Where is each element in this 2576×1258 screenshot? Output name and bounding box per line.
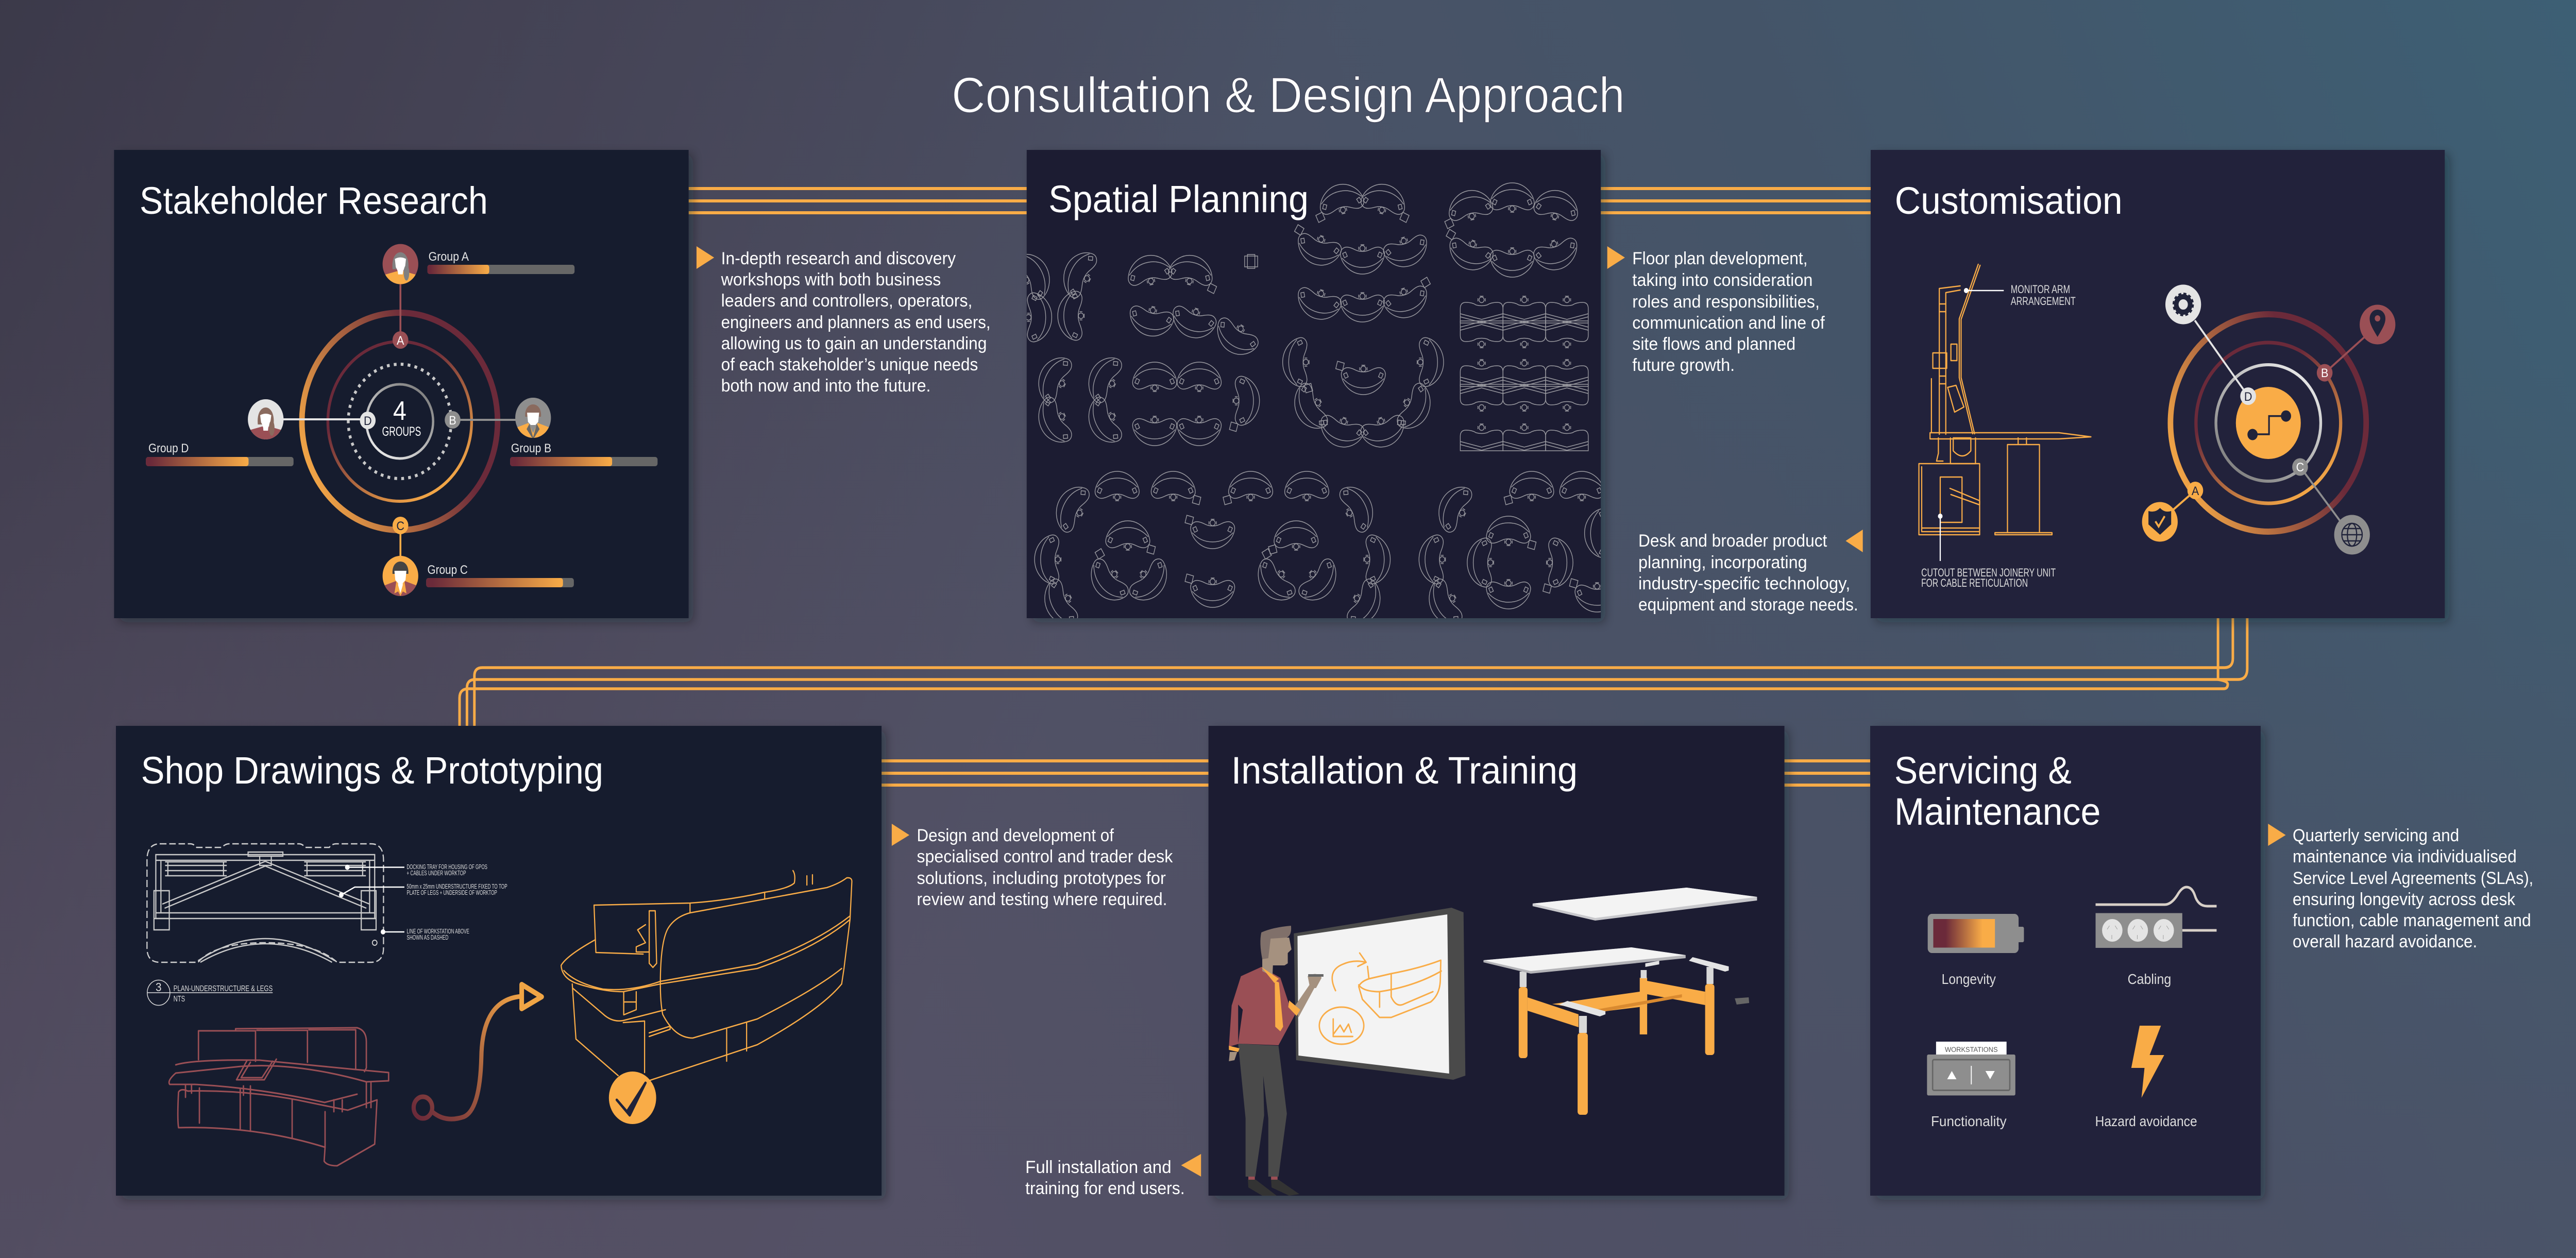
icon: avatar group D [247, 399, 284, 440]
bar: group D [146, 441, 294, 466]
chart: concentric group rings: 4 [393, 396, 406, 426]
icon: approval check [609, 1072, 656, 1124]
chart: customisation rings: A [2192, 484, 2199, 498]
icon: lightning bolt, hazard avoidance: Hazard avoidance [2095, 1113, 2197, 1129]
callout: stakeholder research: engineers and planners as end users, [721, 313, 991, 332]
callout: installation and training [1025, 1154, 1201, 1198]
icon: avatar group A [382, 244, 419, 285]
heading: customisation: Customisation [1895, 179, 2123, 222]
callout: shop drawings [892, 824, 1173, 909]
callout: customisation: industry-specific technology, [1638, 574, 1850, 593]
icon: globe [2334, 515, 2370, 554]
drawing reference tag: PLAN-UNDERSTRUCTURE & LEGS [174, 984, 273, 993]
icon: location pin [2360, 305, 2395, 344]
callout: spatial planning: taking into consideration [1632, 270, 1812, 290]
drawing reference tag [147, 980, 273, 1006]
annotation: cutout [1921, 514, 2056, 589]
callout: servicing: Quarterly servicing and [2293, 826, 2459, 845]
chart: concentric group rings: GROUPS [382, 424, 421, 439]
heading: servicing: Servicing & [1894, 749, 2072, 792]
annotation: docking tray: DOCKING TRAY FOR HOUSING OF GPOS [406, 863, 487, 871]
panel: stakeholder research [114, 150, 689, 618]
connectors: bottom row [882, 759, 1870, 787]
callout: shop drawings: Design and development of [917, 826, 1114, 845]
callout: customisation [1638, 530, 1863, 614]
callout: spatial planning: site flows and planned [1632, 334, 1795, 353]
icon: desk controller, functionality: WORKSTATIONS [1945, 1045, 1998, 1053]
callout: shop drawings: specialised control and trader desk [917, 847, 1173, 866]
callout: stakeholder research: both now and into the future. [721, 376, 930, 395]
annotation: monitor arm: MONITOR ARM [2011, 283, 2070, 296]
annotation: workstation line [381, 927, 469, 941]
annotation: docking tray [345, 863, 487, 877]
icon: battery, longevity: Longevity [1942, 971, 1996, 987]
annotation: workstation line: SHOWN AS DASHED [406, 933, 448, 941]
callout: servicing: maintenance via individualised [2293, 847, 2517, 866]
annotation: understructure [339, 882, 507, 897]
callout: stakeholder research: of each stakeholder’s unique needs [721, 355, 978, 374]
icon: avatar group B [515, 397, 552, 438]
annotation: monitor arm [1964, 283, 2076, 308]
bar: group C: Group C [428, 563, 468, 576]
main title: Consultation & Design Approach [952, 67, 1625, 123]
panel: servicing and maintenance [1870, 726, 2261, 1196]
bar: group B [510, 441, 657, 466]
chart: customisation rings [2171, 314, 2366, 532]
heading: spatial planning: Spatial Planning [1048, 178, 1309, 220]
heading: maintenance: Maintenance [1894, 790, 2100, 833]
callout: customisation: Desk and broader product [1638, 531, 1827, 550]
callout: spatial planning [1607, 246, 1825, 375]
heading: stakeholder research: Stakeholder Research [140, 179, 488, 222]
section drawing of desk [1919, 264, 2091, 535]
annotation: understructure: 50mm x 25mm UNDERSTRUCTURE FIXED TO TOP [406, 882, 507, 890]
callout: shop drawings: solutions, including prototypes for [917, 869, 1166, 888]
figure: presenter [1229, 926, 1324, 1196]
orange line drawing of desk [561, 871, 852, 1080]
icon: avatar group C [382, 555, 419, 597]
callout: stakeholder research: leaders and controllers, operators, [721, 291, 972, 310]
callout: customisation: planning, incorporating [1638, 553, 1807, 572]
technical plan drawing [147, 844, 383, 962]
chart: concentric group rings: D [364, 414, 372, 428]
icon: shield [2142, 502, 2178, 542]
callout: stakeholder research: workshops with both business [721, 270, 941, 289]
drawing reference tag: 3 [156, 980, 162, 994]
chart: concentric group rings: A [397, 333, 404, 347]
callout: customisation: equipment and storage needs. [1638, 595, 1858, 614]
bar: group A: Group A [429, 249, 469, 263]
callout: installation and training: training for end users. [1025, 1179, 1185, 1198]
callout: stakeholder research: allowing us to gain an understanding [721, 334, 987, 353]
callout: spatial planning: future growth. [1632, 355, 1735, 375]
callout: installation and training: Full installation and [1025, 1158, 1172, 1177]
annotation: cutout: CUTOUT BETWEEN JOINERY UNIT [1921, 567, 2056, 579]
bar: group D: Group D [148, 441, 189, 455]
chart: concentric group rings: C [396, 519, 404, 533]
panel: shop drawings and prototyping [116, 726, 882, 1196]
floor plan of desk clusters [1012, 180, 1619, 633]
connectors: between rows [460, 618, 2247, 726]
chart: customisation rings: C [2296, 460, 2304, 474]
heading: installation: Installation & Training [1231, 749, 1578, 792]
icon: power strip, cabling: Cabling [2128, 971, 2171, 987]
annotation: understructure: PLATE OF LEGS + UNDERSIDE OF WORKTOP [406, 889, 497, 896]
icon: desk controller, functionality [1927, 1042, 2015, 1129]
callout: spatial planning: communication and line of [1632, 313, 1825, 332]
panel: installation and training [1209, 726, 1785, 1196]
callout: shop drawings: review and testing where required. [917, 890, 1167, 909]
icon: power strip, cabling [2096, 887, 2216, 987]
icon: desk controller, functionality: Functionality [1931, 1113, 2007, 1129]
arrow: prototype to final [414, 984, 541, 1119]
chart: customisation rings: D [2244, 389, 2252, 403]
icon: lightning bolt, hazard avoidance [2095, 1026, 2197, 1129]
annotation: cutout: FOR CABLE RETICULATION [1921, 577, 2028, 589]
drawing reference tag: NTS [174, 994, 185, 1004]
annotation: workstation line: LINE OF WORKSTATION ABOVE [406, 927, 469, 935]
icon: battery, longevity [1928, 914, 2024, 987]
callout: servicing: function, cable management and [2293, 911, 2531, 930]
callout: stakeholder research: In-depth research and discovery [721, 249, 956, 268]
red line drawing of desk [169, 1028, 388, 1166]
callout: spatial planning: Floor plan development, [1632, 249, 1808, 268]
bar: group B: Group B [511, 441, 551, 455]
callout: spatial planning: roles and responsibilities, [1632, 292, 1820, 311]
chart: concentric group rings: B [449, 413, 456, 427]
callout: stakeholder research [697, 246, 991, 395]
connectors: top row [689, 187, 1871, 214]
callout: servicing [2268, 824, 2533, 951]
bar: group C [426, 563, 574, 587]
annotation: monitor arm: ARRANGEMENT [2011, 295, 2076, 308]
annotation: docking tray: + CABLES UNDER WORKTOP [406, 869, 466, 877]
callout: servicing: ensuring longevity across desk [2293, 890, 2516, 909]
heading: shop drawings: Shop Drawings & Prototyping [141, 749, 603, 792]
chart: concentric group rings [283, 281, 517, 559]
panel: customisation [1871, 150, 2445, 618]
whiteboard with sketches [1294, 908, 1465, 1080]
chart: customisation rings: B [2321, 366, 2328, 380]
illustration: exploded height-adjustable desk [1483, 888, 1757, 1115]
panel: spatial planning [1012, 150, 1619, 633]
callout: servicing: Service Level Agreements (SLAs), [2293, 869, 2533, 888]
bar: group A [428, 249, 574, 274]
callout: servicing: overall hazard avoidance. [2293, 932, 2477, 951]
icon: gear [2165, 284, 2201, 325]
